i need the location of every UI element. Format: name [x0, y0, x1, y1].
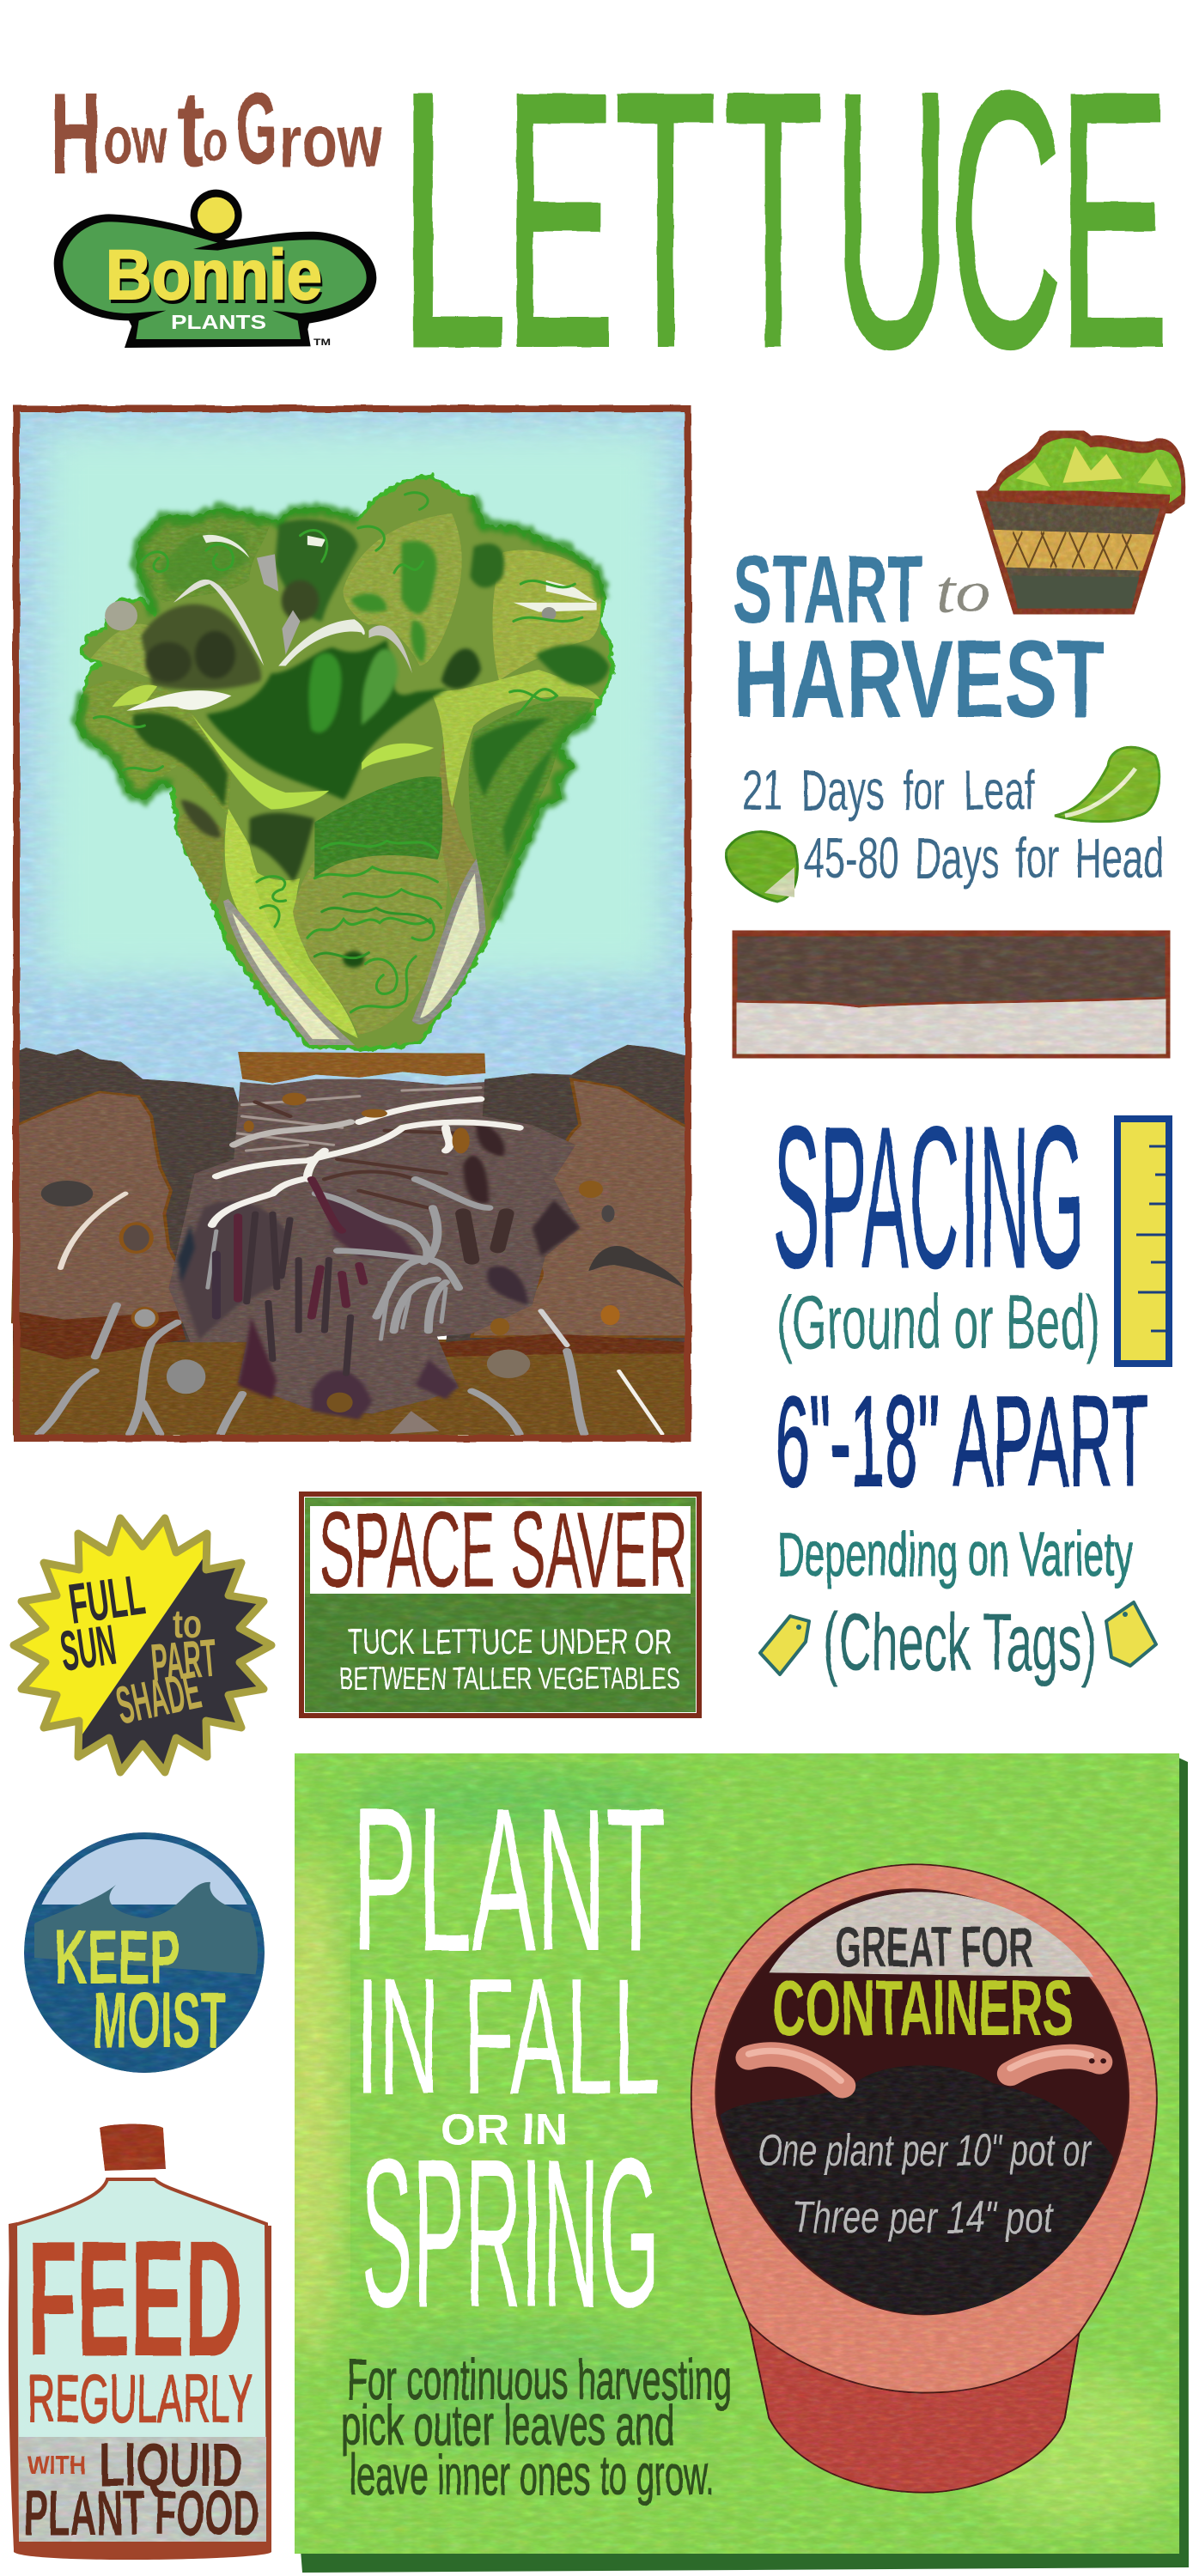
heading: How to Grow: ow [104, 102, 167, 178]
liquid level [19, 2437, 266, 2542]
heading: Start to Harvest [733, 536, 1105, 741]
logo: Bonnie Plants [54, 190, 376, 348]
heading: How to Grow: row [279, 100, 383, 183]
bottle cap [100, 2124, 166, 2171]
panel: space saver [301, 1491, 699, 1716]
heading: How to Grow: G [236, 72, 277, 185]
text: feed regularly: WITH [27, 2451, 86, 2480]
panel: plant in fall or spring: SPRING [361, 2115, 660, 2352]
text: keep moist: KEEP [54, 1915, 180, 2001]
green banner [305, 1498, 696, 1712]
icon: left tag [760, 1616, 809, 1674]
badge: full sun to part shade: PART [149, 1629, 219, 1693]
panel: plant in fall or spring: PLANT [352, 1766, 666, 1994]
text: liquid plant food: PLANT FOOD [24, 2477, 259, 2549]
bottle walls [9, 2222, 271, 2560]
dark root shapes [178, 1125, 580, 1419]
title: LETTUCE: L [398, 15, 508, 424]
text: liquid plant food [24, 2432, 259, 2549]
light inner wall [769, 1892, 1093, 1977]
lettuce head [78, 475, 613, 1049]
green scribbles [94, 493, 582, 1012]
heading: How to Grow: H [50, 68, 101, 198]
title: LETTUCE: T [614, 15, 717, 424]
heading: plant in fall: IN FALL [356, 1943, 660, 2129]
root streaks [208, 1088, 507, 1374]
text: continuous harvesting: leave inner ones to grow. [350, 2443, 715, 2506]
frame [16, 409, 688, 1438]
text: great for containers [772, 1915, 1074, 2052]
soil and roots [13, 1045, 691, 1436]
text: tuck lettuce [339, 1621, 680, 1696]
text: days to harvest [742, 758, 1164, 890]
leaf colour areas [83, 513, 601, 1042]
title: LETTUCE: E [503, 15, 616, 424]
root highlights [39, 1099, 662, 1434]
text: feed regularly: REGULARLY [27, 2360, 253, 2436]
heading: plant in fall [352, 1766, 666, 2352]
dark upper soil [13, 1045, 688, 1342]
text: feed regularly: FEED [27, 2206, 243, 2391]
pot interior [715, 1889, 1129, 2314]
panel: start to harvest [726, 433, 1184, 1056]
text: feed regularly [27, 2206, 253, 2480]
soil box under lettuce [238, 1052, 485, 1084]
soil [720, 2065, 1114, 2314]
worms [749, 2050, 1106, 2086]
logo: Bonnie Plants: PLANTS [171, 311, 266, 333]
text: tuck lettuce: TUCK LETTUCE UNDER OR [348, 1621, 672, 1662]
wave scene [34, 1839, 258, 1975]
heading: How to Grow: o [203, 109, 228, 173]
text: plants per pot: Three per 14" pot [792, 2193, 1055, 2243]
heading: How to Grow: t [177, 68, 204, 189]
text: plants per pot [758, 2126, 1093, 2243]
text: continuous harvesting [341, 2348, 732, 2506]
icon: lettuce head [726, 832, 797, 902]
bright leaf swooshes and light strips [113, 649, 434, 809]
icon: lettuce leaf [1055, 747, 1160, 822]
red soil ragged strips [13, 1311, 691, 1359]
title: LETTUCE: T [723, 15, 824, 424]
badge: full sun to part shade: to [173, 1601, 202, 1646]
icon: ruler [1117, 1119, 1169, 1364]
bottle body [10, 2179, 268, 2555]
panel: keep moist [24, 1832, 265, 2073]
icon: basket of lettuce [980, 433, 1184, 611]
badge: full sun to part shade [10, 1515, 275, 1776]
text: keep moist: MOIST [93, 1977, 226, 2064]
text: great for containers: GREAT FOR [835, 1915, 1033, 1978]
brown soil left [13, 1092, 191, 1322]
panel: spacing [760, 1084, 1169, 1688]
panel: plant in fall or spring [275, 1753, 1189, 2573]
logo: Bonnie Plants: Bonnie [107, 240, 324, 318]
deep brown band [13, 1340, 688, 1436]
sky background [16, 409, 688, 1121]
bar: soil strip [734, 933, 1168, 1056]
white veins [105, 535, 597, 711]
panel: feed regularly bottle [9, 2124, 271, 2560]
pot body [749, 2323, 1080, 2493]
heading: plant in fall: OR IN [441, 2105, 568, 2154]
title: LETTUCE: U [832, 15, 951, 424]
green frill edge [78, 496, 604, 919]
green background [275, 1753, 1179, 2554]
logo: Bonnie Plants: TM [313, 337, 331, 348]
title: LETTUCE [398, 15, 1170, 424]
text: tuck lettuce: BETWEEN TALLER VEGETABLES [339, 1661, 680, 1696]
root mass [168, 1079, 580, 1414]
logo: Bonnie Plants: Bonnie [106, 236, 322, 314]
soil stones and spots [41, 1093, 684, 1434]
text: days to harvest: 21 Days for Leaf [742, 758, 1035, 822]
dark folds [133, 519, 609, 968]
panel shadow [301, 1757, 1189, 2573]
heading: Start to Harvest: to [936, 559, 991, 625]
icon: right tag [1106, 1602, 1156, 1666]
badge: full sun to part shade: SHADE [112, 1661, 206, 1736]
heading: How to Grow [50, 68, 383, 198]
text: continuous harvesting: For continuous harvesting [347, 2348, 732, 2411]
text: continuous harvesting: pick outer leaves and [341, 2393, 674, 2457]
text: keep moist [54, 1915, 226, 2064]
heading: Start to Harvest: START [733, 536, 922, 643]
badge: full sun to part shade: FULL [65, 1562, 149, 1636]
badge: full sun to part shade: SUN [57, 1613, 119, 1683]
brown soil right [472, 1079, 688, 1337]
illustration: terracotta pot [691, 1864, 1157, 2493]
pot rim [691, 1864, 1157, 2393]
panel: lettuce illustration with roots [13, 409, 691, 1438]
text: liquid plant food: LIQUID [99, 2432, 242, 2500]
panel: space saver: SPACE SAVER [319, 1491, 687, 1610]
